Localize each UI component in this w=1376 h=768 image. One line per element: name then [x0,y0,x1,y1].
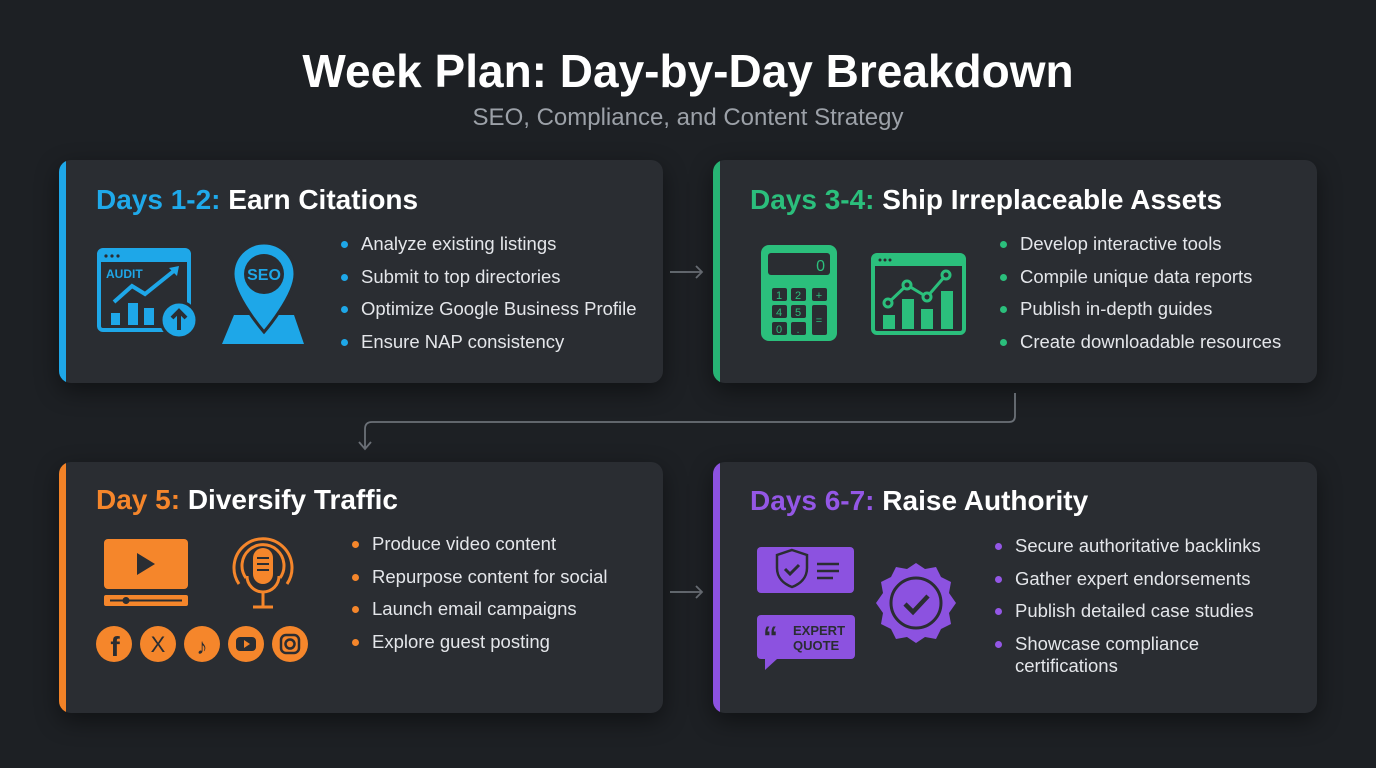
icon row: social media: f [110,631,120,662]
heading: days 1-2: Days 1-2: Earn Citations [96,184,418,215]
heading: days 6-7: Days 6-7: Raise Authority [750,485,1088,516]
icon: expert quote: EXPERT [793,623,845,638]
icon: video player [104,539,188,606]
panel: days 6-7 [713,462,1317,713]
heading: day 5: Day 5: Diversify Traffic [96,484,398,515]
icon: analytics browser [871,253,966,335]
bullet list: Ensure NAP consistency [361,330,564,352]
icon: calculator: = [816,315,822,327]
icon: calculator: 0 [776,324,782,336]
bullet list: Explore guest posting [372,630,550,652]
bullet list [1000,233,1281,352]
bullet list: Submit to top directories [361,266,560,286]
icon row: social media: X [151,632,166,657]
icon: badge check [876,563,956,643]
icon: calculator: + [816,290,822,302]
panel: days 3-4 [713,160,1317,383]
icon: certificate shield [757,547,854,593]
icon: calculator: 4 [776,307,782,319]
icon: calculator [761,245,837,341]
icon: calculator: 2 [795,290,801,302]
bullet list: Create downloadable resources [1020,330,1281,352]
icon: calculator: . [796,324,800,336]
bullet list: Develop interactive tools [1020,233,1222,254]
icon: expert quote: “ [763,621,778,654]
bullet list [341,233,637,352]
title: Week Plan: Day-by-Day Breakdown [302,45,1074,97]
icon: audit chart [97,248,196,336]
bullet list: certifications [1015,654,1118,676]
heading: days 3-4: Days 3-4: Ship Irreplaceable Assets [750,184,1222,215]
icon: expert quote: QUOTE [793,638,840,653]
bullet list [352,533,608,652]
icon: calculator: 0 [816,258,825,275]
icon: seo map pin: SEO [247,267,281,284]
bullet list: Analyze existing listings [361,233,556,254]
subtitle: SEO, Compliance, and Content Strategy [473,104,903,131]
icon row: social media: ♪ [196,634,208,659]
bullet list: Compile unique data reports [1020,266,1252,286]
bullet list: Optimize Google Business Profile [361,298,637,319]
bullet list: Showcase compliance [1015,632,1199,654]
panel: days 1-2 [59,160,663,383]
icon: expert quote [757,615,855,670]
bullet list: Gather expert endorsements [1015,568,1250,588]
bullet list: Secure authoritative backlinks [1015,535,1261,556]
bullet list: Produce video content [372,533,556,554]
icon row: social media [96,626,308,662]
arrow: 1 to 2 [670,266,704,278]
bullet list: Publish detailed case studies [1015,600,1254,621]
bullet list [995,535,1261,676]
icon: seo map pin [222,244,304,344]
icon: podcast mic [232,537,294,608]
bullet list: Repurpose content for social [372,566,608,586]
arrow: 2 to 3 connector [358,393,1016,450]
arrow: 3 to 4 [670,586,704,598]
bullet list: Launch email campaigns [372,598,577,619]
icon: calculator: 1 [776,290,782,302]
icon: audit chart: AUDIT [106,267,143,281]
panel: day 5 [59,462,663,713]
bullet list: Publish in-depth guides [1020,298,1212,319]
icon: calculator: 5 [795,307,801,319]
